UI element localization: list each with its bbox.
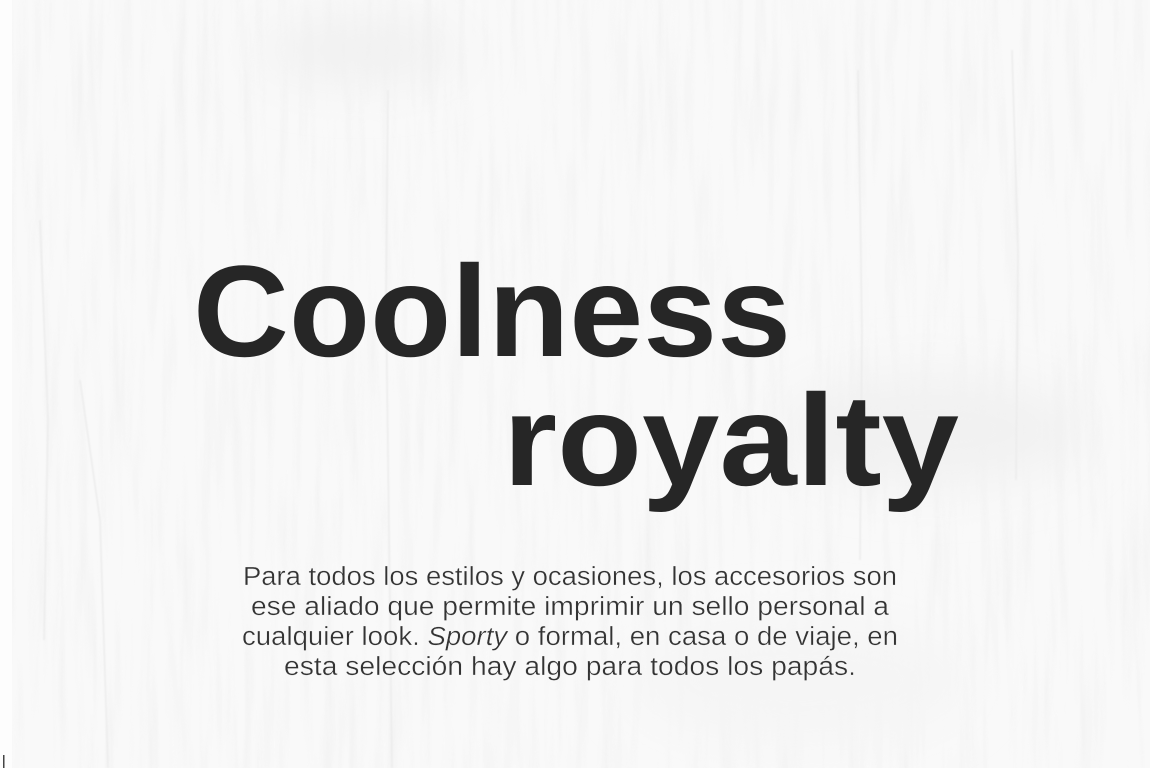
intro paragraph: [242, 563, 898, 681]
corner tick mark: [3, 755, 4, 768]
title line: royalty: royalty: [503, 367, 959, 513]
paragraph line 1: Para todos los estilos y ocasiones, los accesorios son: [243, 563, 897, 591]
title line: Coolness: Coolness: [193, 238, 791, 384]
paragraph line 3: cualquier look. Sporty o formal, en casa o de viaje, en: [242, 623, 898, 651]
paragraph line 2: ese aliado que permite imprimir un sello personal a: [251, 593, 890, 621]
paragraph line 4: esta selección hay algo para todos los papás.: [284, 653, 856, 681]
title: Coolness royalty: [193, 238, 959, 513]
